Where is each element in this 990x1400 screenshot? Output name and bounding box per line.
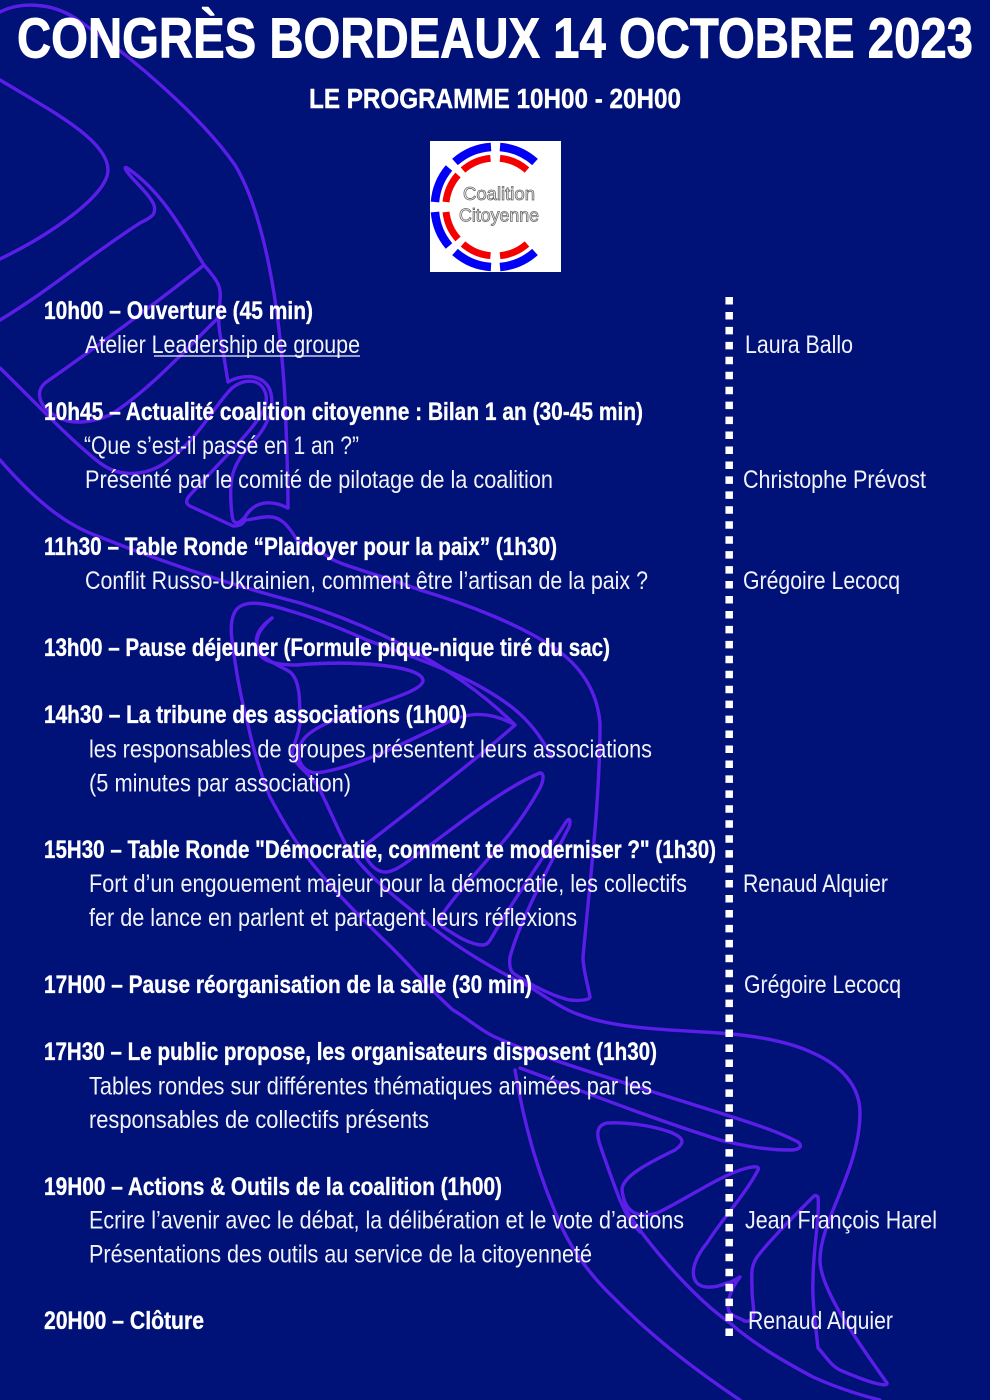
programme item: 11h30: Conflit Russo-Ukrainien, comment être l’artisan de la paix ? <box>85 567 648 595</box>
programme item: 14h30: (5 minutes par association) <box>89 770 351 798</box>
speakers column <box>743 331 937 1335</box>
programme item: 17H30 <box>44 1038 657 1134</box>
programme item: 15H30 <box>44 836 716 932</box>
programme item: 14h30: 14h30 – La tribune des associations (1h00) <box>44 701 467 729</box>
speakers column: Christophe Prévost <box>743 466 926 494</box>
dotted vertical divider <box>725 297 733 1336</box>
programme item: 10h45: “Que s’est-il passé en 1 an ?” <box>84 432 359 460</box>
programme item: 17H30: 17H30 – Le public propose, les organisateurs disposent (1h30) <box>44 1038 657 1066</box>
logo: Coalition Citoyenne: Citoyenne <box>459 206 539 226</box>
programme item: 10h45 <box>44 398 643 494</box>
programme item: 10h00 <box>44 297 360 359</box>
speakers column: Renaud Alquier <box>743 870 888 898</box>
programme item: 15H30: fer de lance en parlent et partagent leurs réflexions <box>89 904 577 932</box>
subtitle: LE PROGRAMME 10H00 - 20H00 <box>309 83 681 114</box>
speakers column: Renaud Alquier <box>748 1307 893 1335</box>
programme item: 10h45: 10h45 – Actualité coalition citoyenne : Bilan 1 an (30-45 min) <box>44 398 643 426</box>
logo: Coalition Citoyenne: Coalition <box>463 184 535 204</box>
programme item: 14h30: les responsables de groupes présentent leurs associations <box>89 736 652 764</box>
programme item: 10h45: Présenté par le comité de pilotage de la coalition <box>85 466 553 494</box>
logo: Coalition Citoyenne <box>430 141 561 272</box>
programme item: 17H30: responsables de collectifs présents <box>89 1106 429 1134</box>
programme item: 10h00: 10h00 – Ouverture (45 min) <box>44 297 313 325</box>
programme item: 11h30: 11h30 – Table Ronde “Plaidoyer pour la paix” (1h30) <box>44 533 557 561</box>
programme item: 19H00 <box>44 1173 684 1268</box>
programme item: 15H30: 15H30 – Table Ronde "Démocratie, comment te moderniser ?" (1h30) <box>44 836 716 864</box>
programme item: 17H30: Tables rondes sur différentes thématiques animées par les <box>89 1072 652 1100</box>
speakers column: Grégoire Lecocq <box>744 971 901 999</box>
programme item: 11h30 <box>44 533 648 595</box>
speakers column: Grégoire Lecocq <box>743 567 900 595</box>
programme item: 20H00: 20H00 – Clôture <box>44 1307 204 1335</box>
programme item: 17H00: 17H00 – Pause réorganisation de la salle (30 min) <box>44 971 532 999</box>
programme item: 14h30 <box>44 701 652 798</box>
programme item: 15H30: Fort d’un engouement majeur pour la démocratie, les collectifs <box>89 870 687 898</box>
speakers column: Laura Ballo <box>745 331 853 359</box>
speakers column: Jean François Harel <box>745 1206 937 1234</box>
programme item: 19H00: 19H00 – Actions & Outils de la coalition (1h00) <box>44 1173 502 1201</box>
programme item: 19H00: Présentations des outils au service de la citoyenneté <box>89 1240 592 1268</box>
programme item: 19H00: Ecrire l’avenir avec le débat, la délibération et le vote d’actions <box>89 1206 684 1234</box>
programme item: 10h00: Atelier Leadership de groupe <box>85 331 360 359</box>
programme item: 13h00: 13h00 – Pause déjeuner (Formule pique-nique tiré du sac) <box>44 634 610 662</box>
